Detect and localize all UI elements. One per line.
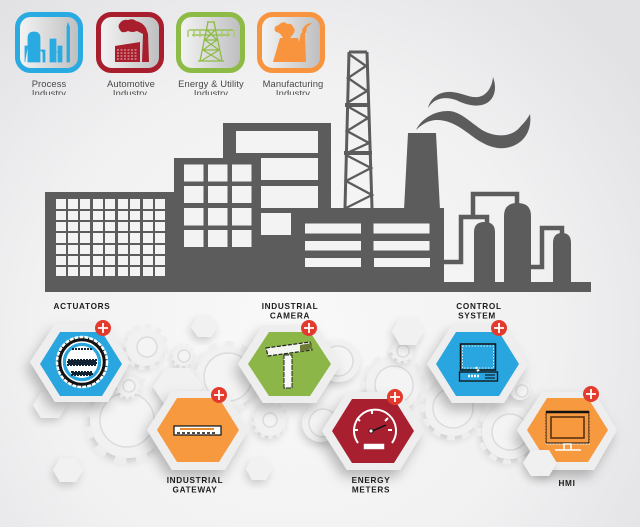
component hexagon: energy meters bbox=[322, 389, 424, 470]
small hexagon bbox=[246, 458, 272, 480]
label: industrial camera: INDUSTRIAL bbox=[262, 302, 318, 311]
component hexagon: industrial camera bbox=[238, 320, 341, 403]
left window grid bbox=[56, 199, 165, 276]
gear bbox=[510, 380, 530, 400]
gear bbox=[124, 326, 166, 368]
label: automotive industry: Industry bbox=[113, 88, 147, 98]
badge: plus bbox=[387, 389, 403, 405]
gear bbox=[391, 338, 415, 362]
small hexagon over hmi bbox=[523, 450, 557, 476]
label: energy and utility industry: Energy & Utility bbox=[178, 78, 244, 89]
icon: process industry bbox=[18, 14, 80, 70]
smoke plumes bbox=[416, 77, 530, 148]
component hexagon: control system bbox=[427, 320, 528, 403]
component hexagon: actuators bbox=[30, 320, 130, 402]
lattice tower bbox=[344, 52, 372, 208]
badge: plus bbox=[583, 386, 599, 402]
icon: camera bbox=[266, 342, 312, 388]
label: manufacturing industry: Manufacturing bbox=[263, 78, 323, 89]
gear bbox=[423, 378, 483, 438]
label: energy meters: ENERGY bbox=[352, 476, 390, 485]
icon: gauge bbox=[354, 410, 396, 449]
label: industrial gateway: GATEWAY bbox=[173, 485, 217, 494]
label: manufacturing industry: Industry bbox=[276, 88, 310, 98]
component hexagon: industrial gateway bbox=[147, 387, 248, 470]
label: control system: SYSTEM bbox=[458, 311, 496, 320]
middle window grid bbox=[184, 164, 252, 247]
small hexagon bbox=[392, 318, 424, 345]
gear bbox=[302, 404, 340, 442]
label: energy meters: METERS bbox=[352, 485, 390, 494]
badge: plus bbox=[491, 320, 507, 336]
icon: control panel bbox=[460, 344, 498, 381]
factory silhouette bbox=[45, 52, 591, 292]
icon: automotive industry bbox=[98, 14, 162, 70]
small hexagon bbox=[191, 316, 218, 337]
badge: plus bbox=[301, 320, 317, 336]
horizontal windows bbox=[305, 224, 430, 267]
gear bbox=[253, 403, 287, 437]
icon: gateway bbox=[174, 426, 221, 435]
storage tanks and pipes bbox=[444, 194, 571, 282]
gear bbox=[172, 345, 194, 367]
small hexagon bbox=[33, 392, 67, 418]
label: process industry: Process bbox=[32, 78, 66, 89]
large windows bbox=[236, 131, 318, 235]
industry icons row bbox=[18, 14, 323, 98]
gear bbox=[116, 374, 140, 398]
label: control system: CONTROL bbox=[456, 302, 502, 311]
label: industrial gateway: INDUSTRIAL bbox=[167, 476, 223, 485]
icon: manufacturing industry bbox=[260, 14, 322, 70]
badge: plus bbox=[211, 387, 227, 403]
label: industrial camera: CAMERA bbox=[270, 311, 310, 320]
gear bbox=[194, 344, 260, 410]
label: hmi: HMI bbox=[558, 479, 576, 488]
main building bbox=[45, 123, 591, 292]
icon: actuator bbox=[57, 337, 107, 387]
gear bbox=[479, 402, 539, 462]
decorative gears and small hexagons bbox=[33, 316, 539, 482]
icon: monitor bbox=[546, 412, 590, 450]
gear bbox=[363, 355, 423, 415]
large hexagon bbox=[153, 368, 203, 407]
label: automotive industry: Automotive bbox=[107, 78, 155, 89]
badge: plus bbox=[95, 320, 111, 336]
label: actuators: ACTUATORS bbox=[54, 302, 110, 311]
gear bbox=[87, 379, 169, 461]
label: energy and utility industry: Industry bbox=[194, 88, 228, 98]
component hexagon: hmi bbox=[517, 386, 617, 470]
chimney bbox=[404, 133, 440, 210]
label: process industry: Industry bbox=[32, 88, 66, 98]
gear bbox=[318, 340, 360, 382]
small hexagon bbox=[53, 458, 83, 482]
icon: energy and utility industry bbox=[178, 14, 242, 70]
